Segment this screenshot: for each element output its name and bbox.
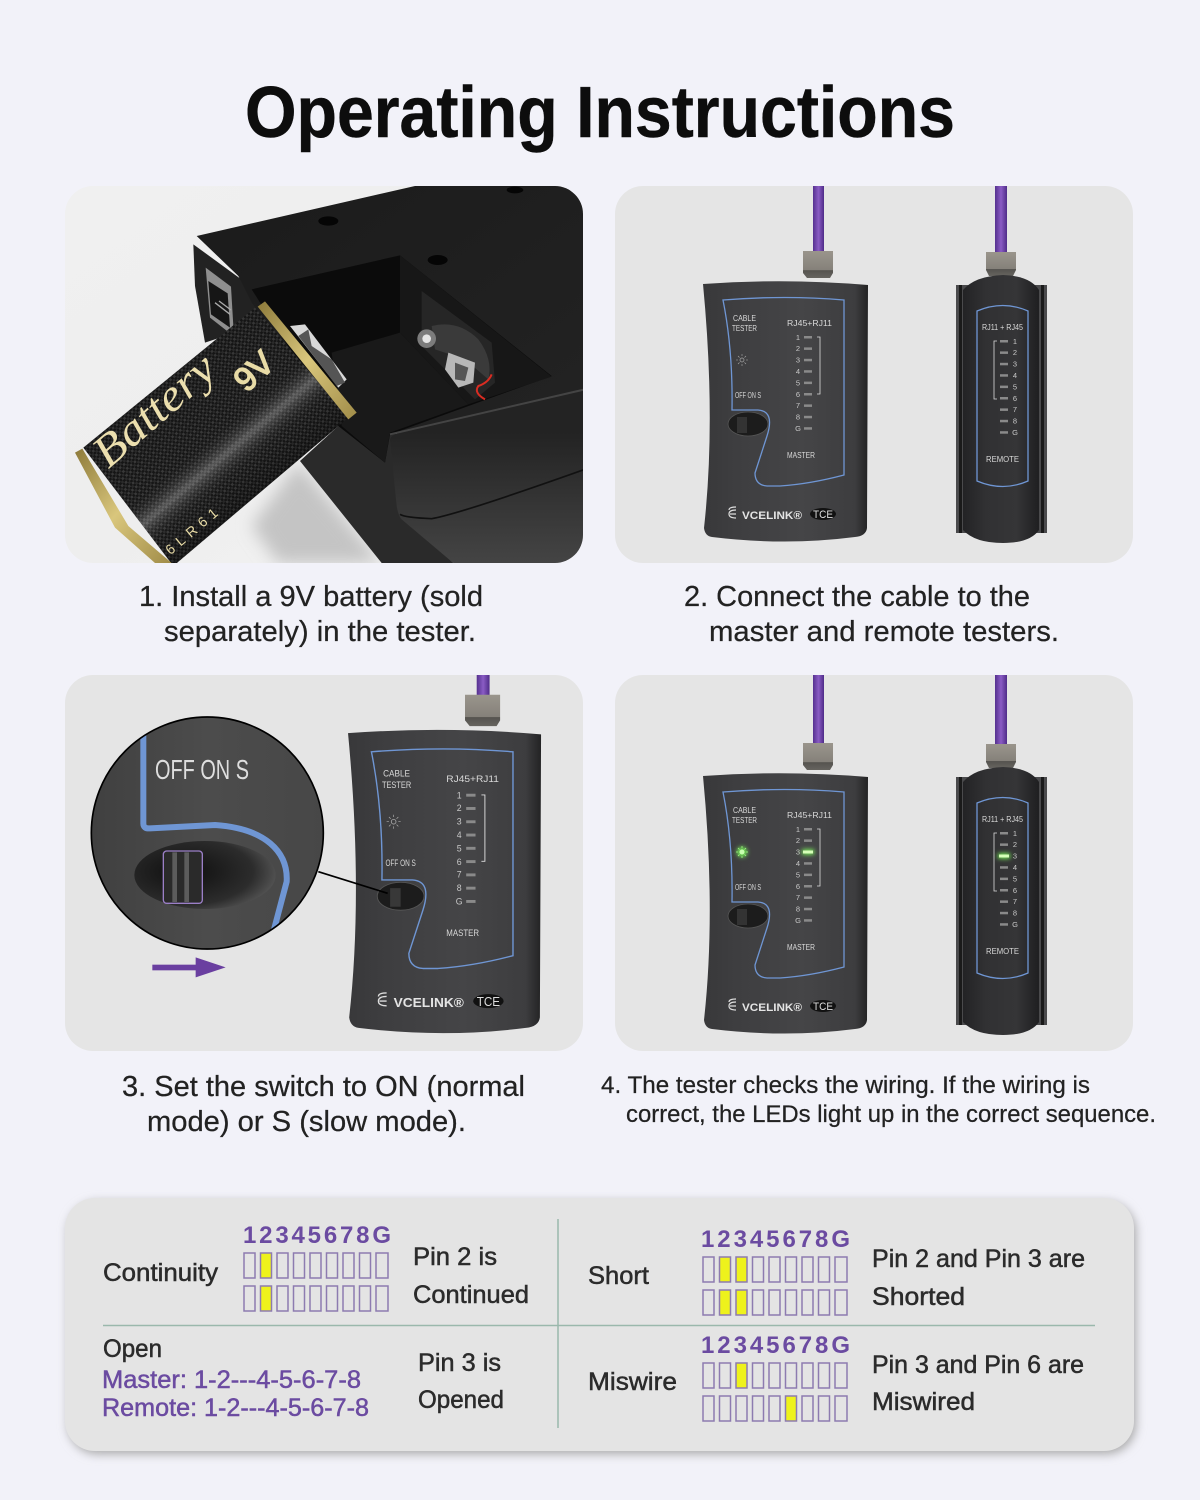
master tester with lit LED: 8 bbox=[796, 904, 800, 914]
master tester with lit LED: 7 bbox=[796, 893, 800, 902]
master tester enlarged bbox=[348, 675, 542, 1034]
master tester enlarged: TCE bbox=[477, 994, 500, 1009]
caption: step 3 bbox=[122, 1071, 525, 1138]
row: continuity: Continued bbox=[413, 1281, 529, 1309]
row: continuity bbox=[103, 1222, 529, 1311]
master tester with lit LED bbox=[703, 672, 868, 1034]
row: miswire bbox=[588, 1332, 1084, 1421]
master tester with lit LED: RJ45+RJ11 bbox=[787, 811, 833, 820]
row: miswire: 12345678G bbox=[701, 1332, 850, 1359]
master tester enlarged: 3 bbox=[457, 817, 462, 827]
tester box bbox=[193, 186, 585, 563]
master tester enlarged: 4 bbox=[457, 830, 462, 840]
magnifier callout: switch detail: OFF ON S bbox=[155, 754, 249, 785]
master tester: MASTER bbox=[787, 451, 815, 460]
row: continuity: 12345678G bbox=[243, 1222, 391, 1249]
remote tester with lit LED: 4 bbox=[1013, 863, 1017, 872]
caption: step 3: 3. Set the switch to ON (normal bbox=[122, 1071, 525, 1103]
master tester bbox=[703, 180, 868, 542]
remote tester with lit LED: 5 bbox=[1013, 874, 1017, 884]
master tester with lit LED: 6 bbox=[796, 882, 800, 891]
panel: step 4 LEDs light up bbox=[615, 672, 1133, 1051]
row: open: Opened bbox=[418, 1386, 504, 1414]
remote tester: G bbox=[1012, 428, 1018, 437]
master tester with lit LED: OFF ON S bbox=[735, 883, 761, 892]
caption: step 1 bbox=[139, 581, 483, 648]
master tester with lit LED: VCELINK® bbox=[742, 1002, 802, 1014]
master tester enlarged: TESTER bbox=[382, 780, 411, 790]
row: continuity: Continuity bbox=[103, 1259, 219, 1287]
row: open: Remote: 1-2---4-5-6-7-8 bbox=[102, 1394, 369, 1422]
caption: step 3: mode) or S (slow mode). bbox=[147, 1106, 466, 1138]
slider knob bbox=[163, 851, 202, 903]
master tester with lit LED: CABLE bbox=[733, 806, 756, 815]
panel: step 3 set switch bbox=[65, 675, 583, 1051]
remote tester: RJ11 + RJ45 bbox=[982, 323, 1023, 332]
master tester: VCELINK® bbox=[742, 510, 802, 522]
master tester: CABLE bbox=[733, 314, 756, 323]
arrow: slide direction bbox=[152, 957, 226, 977]
battery bbox=[75, 301, 357, 566]
master tester enlarged: G bbox=[456, 896, 463, 906]
master tester with lit LED: TESTER bbox=[732, 816, 757, 825]
remote tester with lit LED bbox=[956, 672, 1047, 1035]
row: short: Shorted bbox=[872, 1283, 965, 1311]
master tester: OFF ON S bbox=[735, 391, 761, 400]
remote tester: 3 bbox=[1013, 360, 1017, 368]
master tester enlarged: 6 bbox=[457, 857, 462, 867]
remote tester with lit LED: 7 bbox=[1013, 897, 1017, 906]
row: open bbox=[102, 1335, 504, 1422]
row: miswire: Pin 3 and Pin 6 are bbox=[872, 1351, 1084, 1379]
remote tester: 6 bbox=[1013, 394, 1017, 403]
master tester enlarged: VCELINK® bbox=[394, 995, 464, 1010]
master tester: 6 bbox=[796, 390, 800, 399]
row: continuity: Pin 2 is bbox=[413, 1243, 497, 1271]
master tester: 7 bbox=[796, 401, 800, 410]
battery label: Battery bbox=[82, 343, 226, 477]
remote tester with lit LED: RJ11 + RJ45 bbox=[982, 815, 1023, 824]
remote tester: 8 bbox=[1013, 416, 1017, 426]
remote tester with lit LED: 6 bbox=[1013, 886, 1017, 895]
remote tester with lit LED: 1 bbox=[1013, 829, 1017, 838]
row: open: Open bbox=[103, 1335, 162, 1363]
magnifier callout: switch detail bbox=[91, 717, 388, 977]
battery model mark: 6LR61 bbox=[162, 505, 221, 558]
row: short: 12345678G bbox=[701, 1226, 850, 1253]
caption: step 4 bbox=[601, 1072, 1156, 1128]
remote tester with lit LED: 3 bbox=[1013, 852, 1017, 860]
master tester with lit LED: 4 bbox=[796, 859, 800, 868]
master tester: RJ45+RJ11 bbox=[787, 319, 833, 328]
row: short: Pin 2 and Pin 3 are bbox=[872, 1245, 1085, 1273]
panel: step 2 connect cable bbox=[615, 180, 1133, 563]
caption: step 1: 1. Install a 9V battery (sold bbox=[139, 581, 483, 613]
master tester: G bbox=[795, 424, 801, 433]
master tester: 4 bbox=[796, 367, 800, 376]
master tester: TESTER bbox=[732, 324, 757, 333]
master tester with lit LED: MASTER bbox=[787, 943, 815, 952]
remote tester with lit LED: G bbox=[1012, 920, 1018, 929]
caption: step 2: 2. Connect the cable to the bbox=[684, 581, 1030, 613]
remote tester with lit LED: 8 bbox=[1013, 908, 1017, 918]
master tester enlarged: 7 bbox=[457, 870, 462, 880]
master tester enlarged: 1 bbox=[457, 790, 462, 800]
master tester enlarged: OFF ON S bbox=[385, 858, 416, 868]
master tester with lit LED: G bbox=[795, 916, 801, 925]
master tester: 8 bbox=[796, 412, 800, 422]
master tester enlarged: 8 bbox=[457, 883, 462, 893]
master tester: TCE bbox=[813, 509, 833, 521]
master tester: 5 bbox=[796, 378, 800, 388]
cast shadow bbox=[252, 463, 382, 563]
battery voltage mark: 9V bbox=[227, 344, 282, 399]
master tester with lit LED: 3 bbox=[796, 848, 800, 856]
remote tester: 5 bbox=[1013, 382, 1017, 392]
remote tester: 7 bbox=[1013, 405, 1017, 414]
master tester enlarged: 5 bbox=[457, 843, 462, 853]
row: open: Master: 1-2---4-5-6-7-8 bbox=[102, 1366, 361, 1394]
master tester enlarged: CABLE bbox=[383, 768, 410, 778]
remote tester with lit LED: REMOTE bbox=[986, 947, 1019, 956]
row: short: Short bbox=[588, 1262, 649, 1290]
master tester: 1 bbox=[796, 333, 800, 342]
caption: step 4: 4. The tester checks the wiring. If the wiring is bbox=[601, 1072, 1090, 1099]
panel: step 1 battery photo bbox=[65, 186, 585, 566]
row: miswire: Miswire bbox=[588, 1368, 677, 1396]
master tester enlarged: 2 bbox=[457, 803, 462, 813]
master tester with lit LED: 1 bbox=[796, 825, 800, 834]
remote tester: 1 bbox=[1013, 337, 1017, 346]
remote tester: REMOTE bbox=[986, 455, 1019, 464]
master tester enlarged: MASTER bbox=[446, 928, 479, 938]
master tester enlarged: RJ45+RJ11 bbox=[446, 774, 499, 784]
master tester with lit LED: 5 bbox=[796, 870, 800, 880]
master tester with lit LED: TCE bbox=[813, 1001, 833, 1013]
row: miswire: Miswired bbox=[872, 1388, 975, 1416]
row: short bbox=[588, 1226, 1085, 1315]
remote tester with lit LED: 2 bbox=[1013, 840, 1017, 849]
caption: step 4: correct, the LEDs light up in the correct sequence. bbox=[626, 1101, 1156, 1128]
caption: step 1: separately) in the tester. bbox=[164, 616, 476, 648]
remote tester bbox=[956, 180, 1047, 543]
master tester: 2 bbox=[796, 344, 800, 353]
row: open: Pin 3 is bbox=[418, 1349, 501, 1377]
remote tester: 4 bbox=[1013, 371, 1017, 380]
title: Operating Instructions bbox=[245, 73, 955, 153]
master tester with lit LED: 2 bbox=[796, 836, 800, 845]
caption: step 2: master and remote testers. bbox=[709, 616, 1059, 648]
panel: LED status table bbox=[65, 1198, 1136, 1454]
remote tester: 2 bbox=[1013, 348, 1017, 357]
master tester: 3 bbox=[796, 356, 800, 364]
caption: step 2 bbox=[684, 581, 1059, 648]
